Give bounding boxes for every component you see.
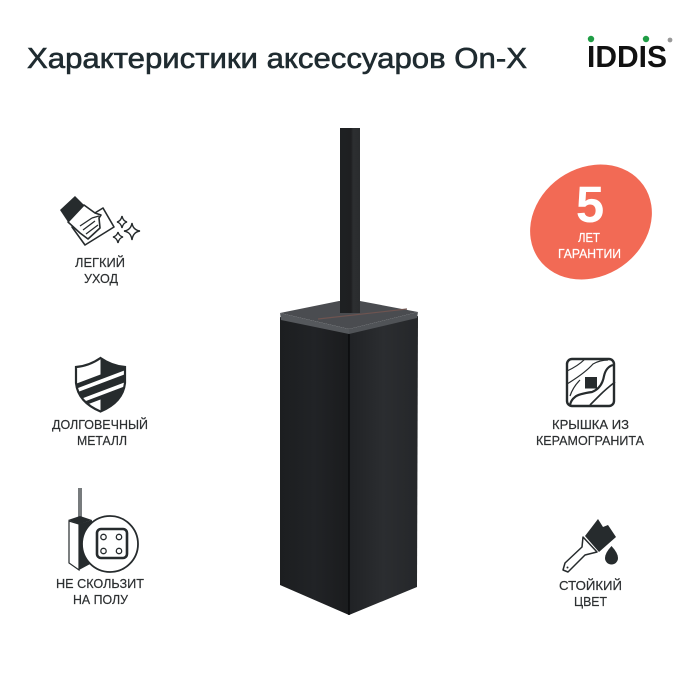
icon: holder with anti-slip base — [68, 488, 138, 572]
feature: durable colour — [559, 519, 622, 609]
label: ДОЛГОВЕЧНЫЙ — [52, 417, 148, 432]
feature: non-slip: НА ПОЛУ — [73, 592, 129, 607]
label: КРЫШКА ИЗ — [552, 417, 629, 432]
logo: IDDIS: IDDIS — [587, 39, 667, 74]
label: СТОЙКИЙ — [559, 578, 622, 593]
feature: easy care: УХОД — [84, 271, 118, 286]
label: НЕ СКОЛЬЗИТ — [56, 576, 144, 591]
badge: 5 year warranty — [508, 141, 674, 303]
badge: 5 year warranty: ГАРАНТИИ — [558, 246, 621, 261]
title: Характеристики аксессуаров On-X — [27, 43, 527, 75]
feature: durable metal — [52, 350, 148, 448]
badge: 5 year warranty: 5 — [576, 176, 604, 233]
icon: paint brush with drop — [563, 519, 618, 572]
label: ЛЕГКИЙ — [75, 255, 125, 270]
feature: easy care — [60, 196, 140, 286]
feature: durable colour: ЦВЕТ — [574, 594, 607, 609]
icon: shield — [74, 356, 126, 413]
ceramic lid — [280, 301, 418, 334]
feature: porcelain stoneware lid — [536, 359, 644, 448]
icon: hand wiping with cloth — [60, 196, 140, 245]
holder right face — [349, 316, 418, 615]
feature: durable metal: МЕТАЛЛ — [77, 433, 127, 448]
feature: porcelain stoneware lid: КЕРАМОГРАНИТА — [536, 433, 644, 448]
badge: 5 year warranty: ЛЕТ — [578, 230, 600, 245]
product: toilet brush holder — [280, 128, 418, 615]
feature: non-slip — [56, 488, 144, 607]
icon: marble tile — [567, 359, 615, 406]
holder left face — [280, 317, 349, 615]
brush handle — [340, 128, 360, 313]
